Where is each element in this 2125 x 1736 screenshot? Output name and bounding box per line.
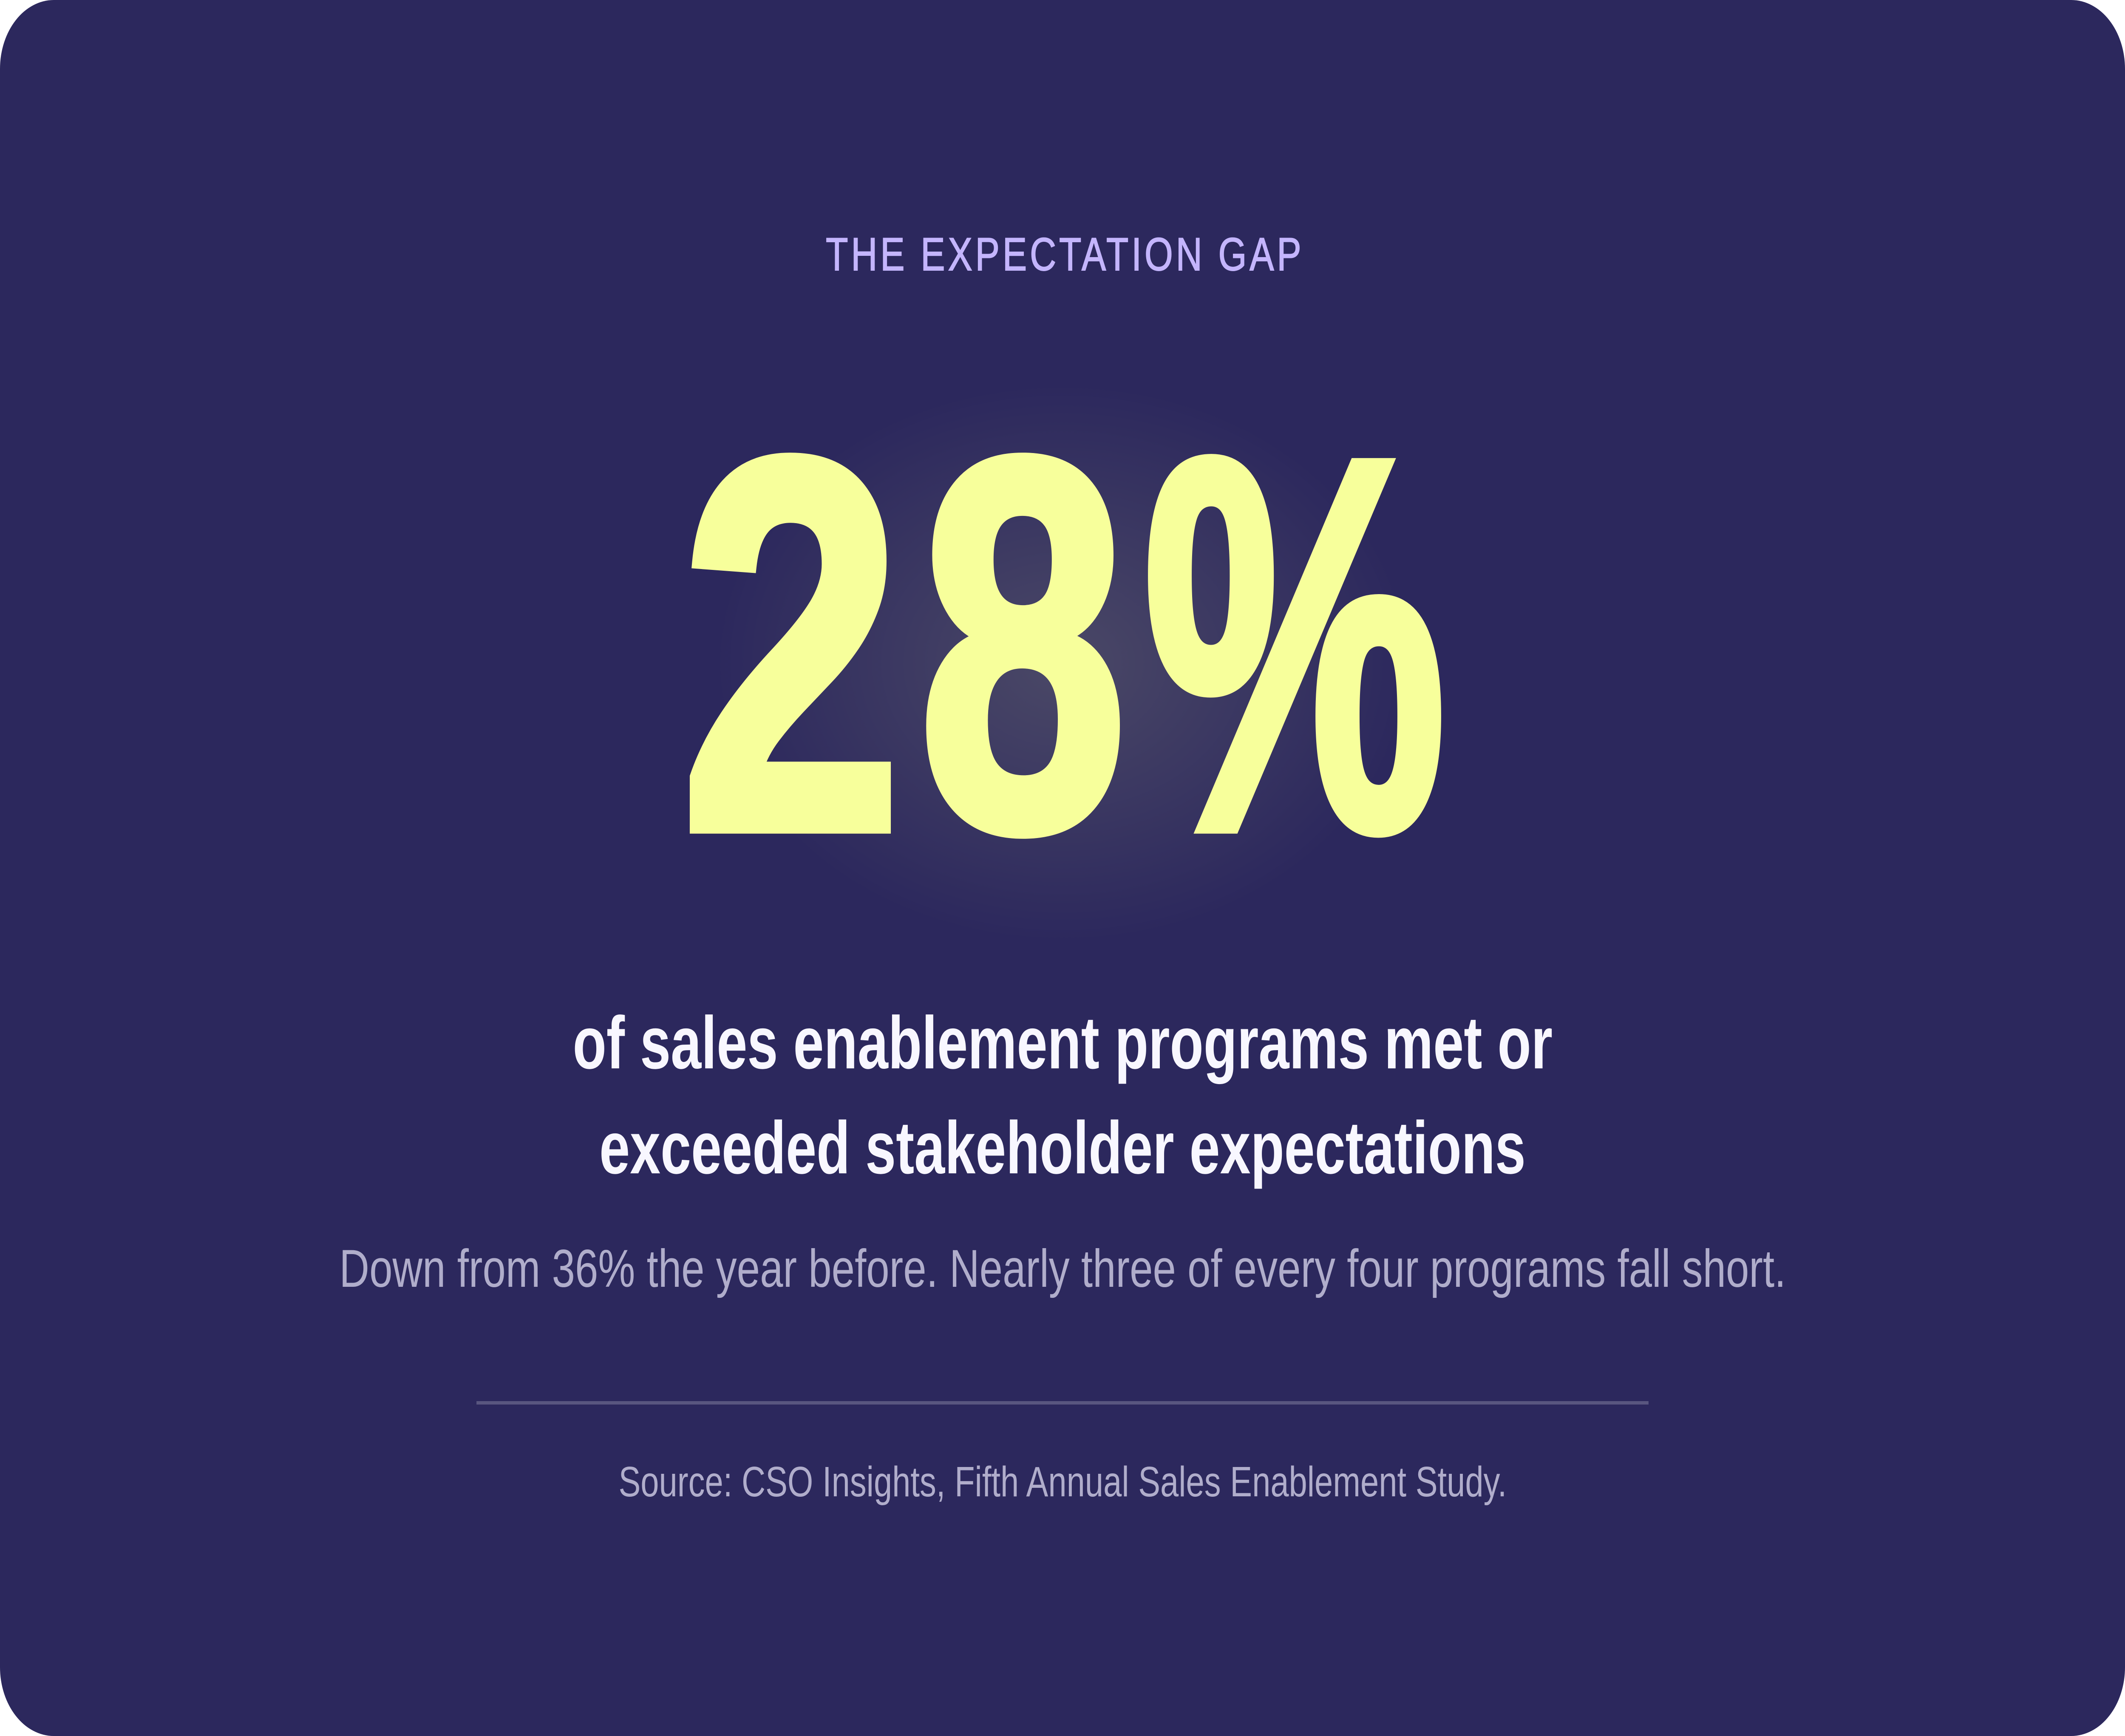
headline statement: of sales enablement programs met or xyxy=(573,1002,1553,1085)
supporting sentence: Down from 36% the year before. Nearly three of every four programs fall short. xyxy=(339,1238,1786,1298)
big statistic: 28%: 8 xyxy=(919,350,1127,940)
eyebrow heading: THE EXPECTATION GAP xyxy=(826,228,1301,280)
headline statement xyxy=(573,1002,1553,1189)
big statistic: 28%: 2 xyxy=(681,350,902,940)
radial glow behind the number xyxy=(714,382,1411,943)
big statistic: 28%: % xyxy=(1144,350,1446,940)
big statistic: 28% xyxy=(681,350,1446,940)
source note: Source: CSO Insights, Fifth Annual Sales Enablement Study. xyxy=(618,1458,1507,1506)
headline statement: exceeded stakeholder expectations xyxy=(599,1107,1526,1189)
